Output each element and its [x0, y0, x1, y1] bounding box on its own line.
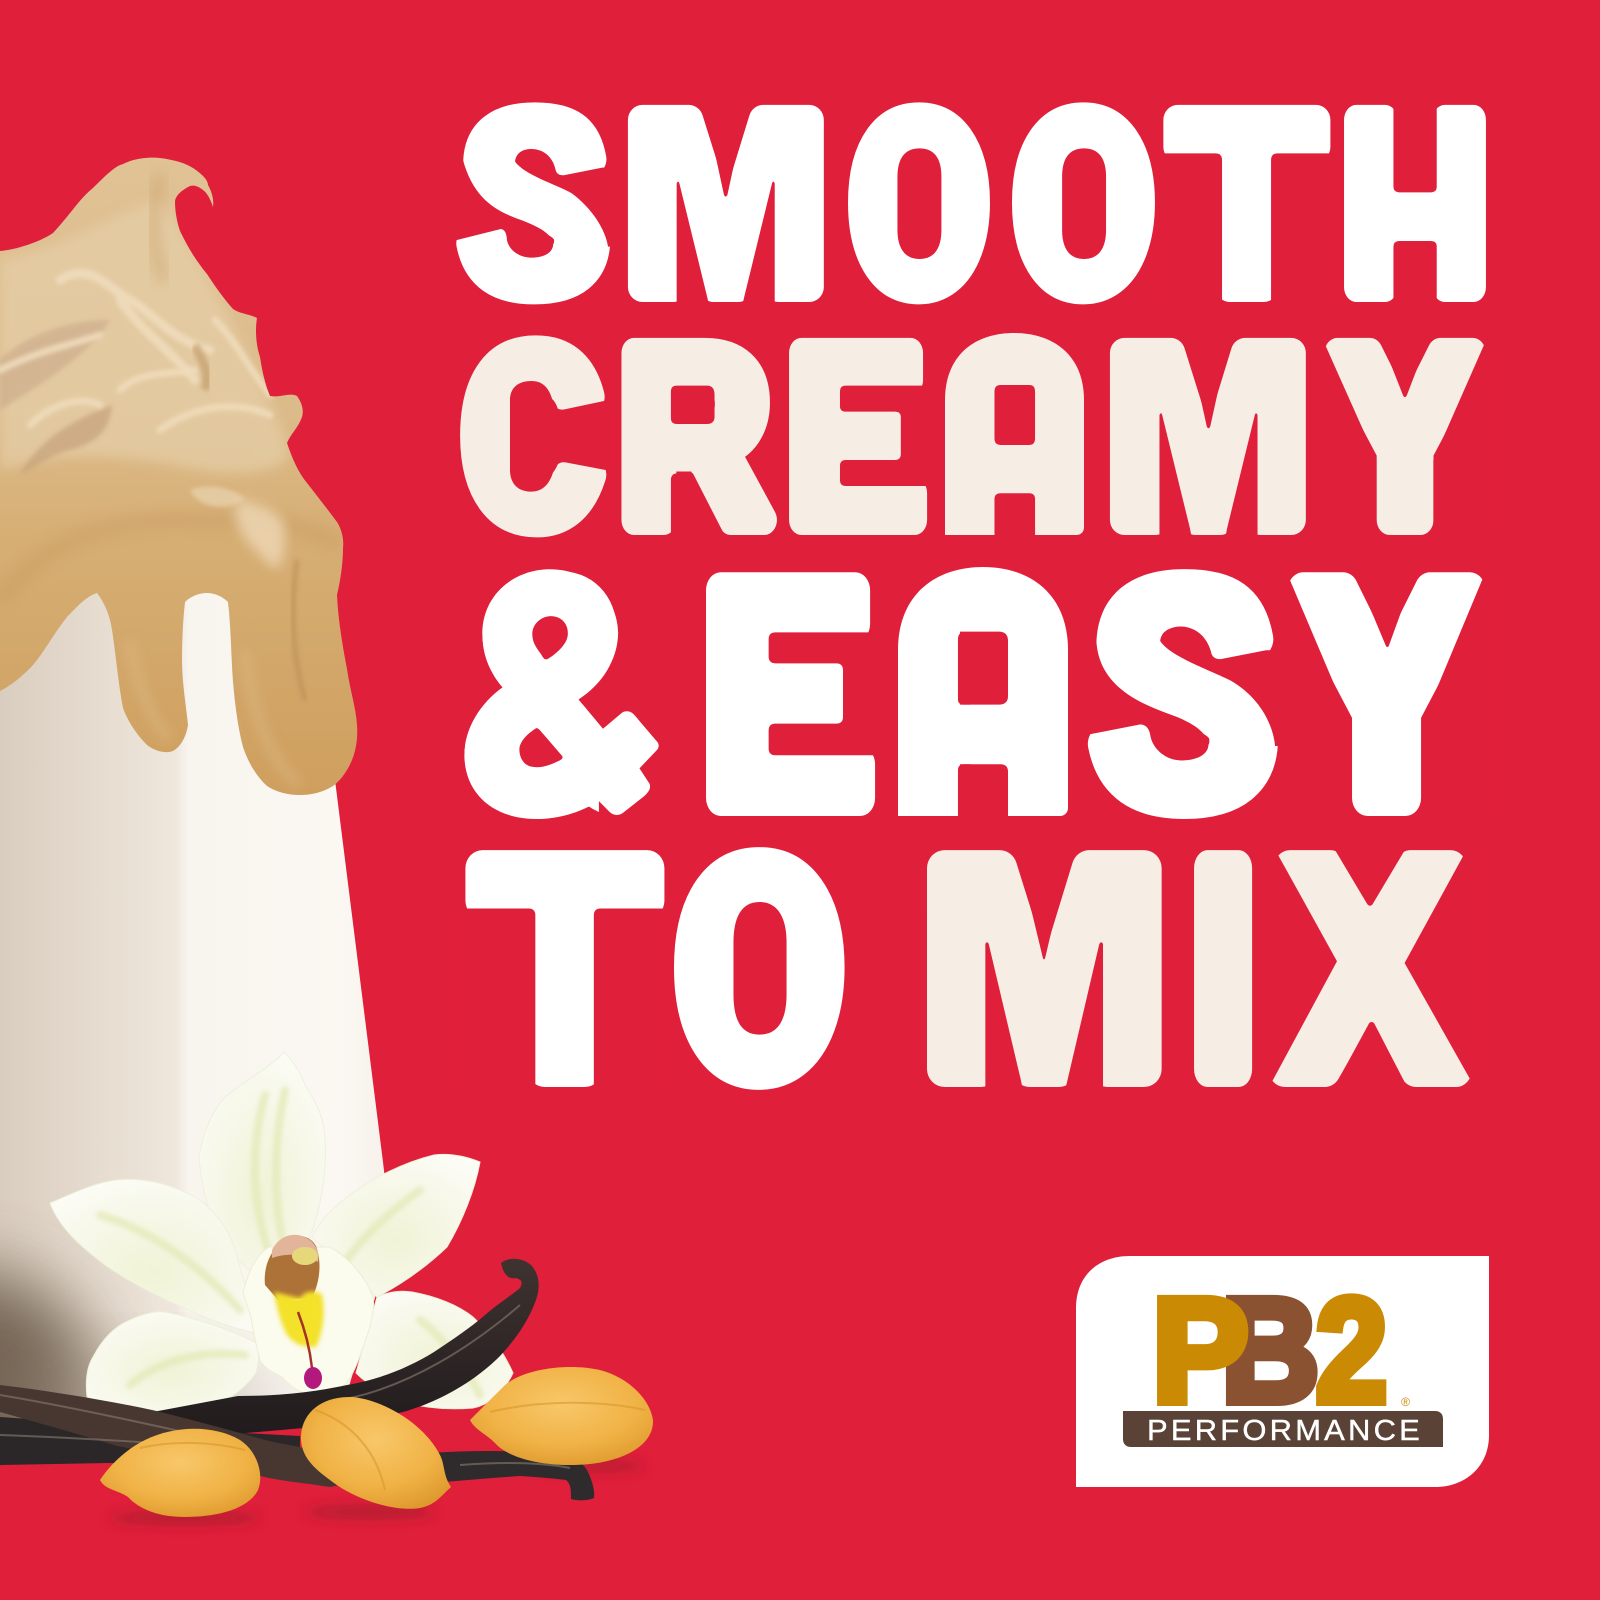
headline line: CREAMY	[464, 300, 1476, 573]
headline line: & EASY: &	[469, 525, 649, 862]
headline line: CREAMY: A	[955, 300, 1074, 572]
headline line: & EASY: Y	[1299, 525, 1474, 862]
peanuts	[100, 1367, 653, 1517]
headline line: MIX	[926, 804, 1460, 1132]
vanilla flower	[50, 1052, 513, 1411]
headline line: SMOOTH: H	[1343, 68, 1487, 339]
headline line: MIX: M	[926, 806, 1163, 1132]
vanilla beans	[0, 1259, 594, 1500]
ground shadows	[110, 1461, 645, 1524]
headline line: SMOOTH: O	[1016, 67, 1151, 339]
headline line: & EASY: S	[1096, 526, 1273, 863]
logo registered mark: ®	[1401, 1395, 1410, 1409]
headline line: SMOOTH: S	[463, 68, 605, 339]
petal: lower right	[356, 1291, 513, 1409]
headline line: TO: O	[678, 804, 840, 1131]
letter counters, background-coloured	[440, 100, 1494, 1090]
peanut: right	[470, 1367, 653, 1465]
bean ridges	[0, 1305, 570, 1468]
flower lip	[243, 1247, 374, 1394]
logo bar: PERFORMANCE: PERFORMANCE	[1147, 1415, 1423, 1447]
logo panel	[1076, 1256, 1489, 1487]
headline line: CREAMY: E	[788, 301, 923, 572]
petal: left	[50, 1179, 256, 1333]
logo wordmark: PB2	[1152, 1268, 1387, 1433]
headline line: & EASY: E	[704, 525, 870, 862]
headline line: MIX: I	[1193, 805, 1253, 1131]
flower yellow throat	[274, 1292, 324, 1347]
headline line: SMOOTH: O	[852, 67, 987, 339]
logo wordmark: PB2: 2	[1316, 1269, 1387, 1433]
headline line: SMOOTH	[463, 67, 1487, 339]
petal: lower left	[86, 1312, 258, 1411]
peanut: middle	[301, 1397, 451, 1509]
jar	[0, 593, 384, 1418]
headline line: CREAMY: R	[620, 300, 769, 572]
headline	[463, 67, 1487, 1132]
headline line: CREAMY: C	[464, 301, 600, 573]
logo wordmark: PB2: B	[1222, 1268, 1319, 1432]
headline line: MIX: X	[1282, 804, 1460, 1131]
headline line: & EASY	[464, 525, 1474, 863]
headline line: SMOOTH: M	[627, 67, 825, 339]
bean: brown left	[0, 1385, 345, 1487]
petal veins	[100, 1090, 480, 1395]
headline line: TO	[480, 804, 840, 1131]
headline line: TO: T	[480, 804, 650, 1131]
peanut butter topping	[0, 158, 357, 795]
illustration: jar with peanut butter, vanilla flower, beans and peanuts	[0, 158, 653, 1530]
bean: long curved	[100, 1259, 539, 1440]
petal: top	[199, 1052, 325, 1290]
bean: right end	[430, 1451, 594, 1500]
headline line: SMOOTH: T	[1175, 67, 1318, 339]
headline line: CREAMY: Y	[1334, 301, 1476, 572]
headline line: CREAMY: M	[1109, 300, 1307, 572]
peanut: left	[100, 1429, 260, 1517]
flower column	[265, 1236, 319, 1300]
headline line: & EASY: A	[910, 525, 1056, 863]
logo wordmark: PB2: P	[1152, 1268, 1248, 1432]
bean: dark left	[0, 1417, 300, 1470]
petal: upper right	[312, 1154, 480, 1297]
